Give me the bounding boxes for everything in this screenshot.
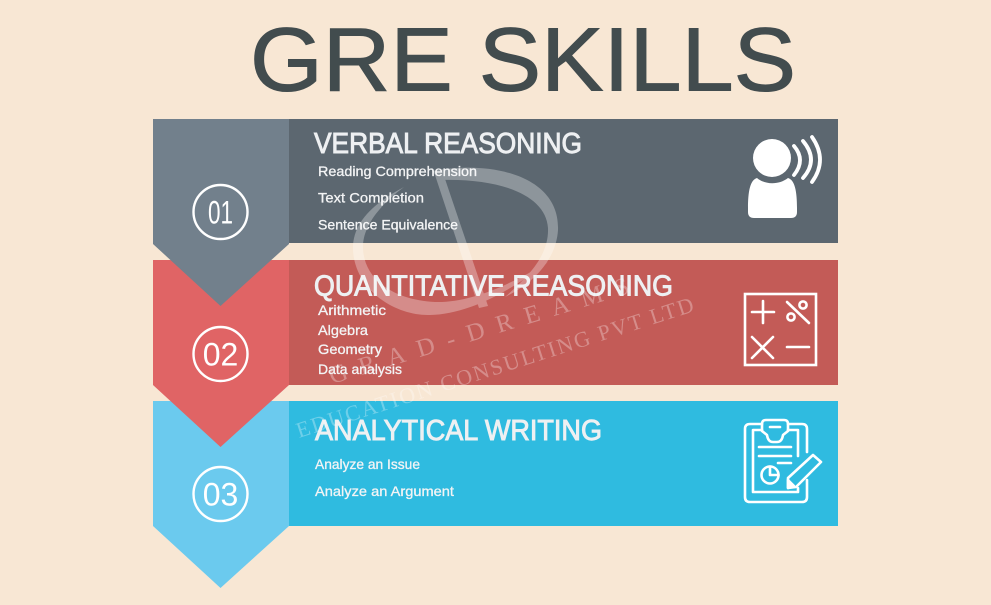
quantitative reasoning list: Geometry xyxy=(318,341,382,357)
icon: person speaking xyxy=(748,137,820,218)
badge 03 xyxy=(194,467,248,521)
badge 02: 02 xyxy=(203,336,238,372)
chevron 01 xyxy=(153,119,289,306)
icon: clipboard with pencil xyxy=(745,420,821,502)
quantitative reasoning list xyxy=(318,302,402,377)
badge 01: 01 xyxy=(208,194,233,230)
verbal reasoning list: Reading Comprehension xyxy=(318,163,477,179)
quantitative reasoning list: Arithmetic xyxy=(318,302,386,318)
chevron 03 xyxy=(153,401,289,588)
watermark: consulting logo: GRAD-DREAMS xyxy=(326,273,632,390)
verbal reasoning list: Sentence Equivalence xyxy=(318,216,458,232)
verbal reasoning heading: VERBAL REASONING xyxy=(314,128,582,160)
icon: math operators xyxy=(745,294,816,365)
analytical writing list: Analyze an Argument xyxy=(315,483,454,499)
verbal reasoning list: Text Completion xyxy=(318,190,424,206)
quantitative reasoning list: Algebra xyxy=(318,322,368,338)
panel: analytical writing bar xyxy=(289,401,838,526)
title: GRE SKILLS xyxy=(250,10,796,110)
badge 01 xyxy=(194,185,248,239)
analytical writing list xyxy=(315,456,454,499)
verbal reasoning list xyxy=(318,163,477,232)
analytical writing list: Analyze an Issue xyxy=(315,456,420,472)
quantitative reasoning list: Data analysis xyxy=(318,361,402,377)
chevron 02 xyxy=(153,260,289,447)
quantitative reasoning heading: QUANTITATIVE REASONING xyxy=(314,270,673,302)
watermark: consulting logo xyxy=(293,168,697,443)
analytical writing heading: ANALYTICAL WRITING xyxy=(315,415,602,447)
badge 02 xyxy=(194,327,248,381)
badge 03: 03 xyxy=(203,476,238,512)
panel: verbal reasoning bar xyxy=(289,119,838,243)
watermark: consulting logo: EDUCATION CONSULTING PVT LTD xyxy=(293,292,697,443)
panel: quantitative reasoning bar xyxy=(289,260,838,385)
